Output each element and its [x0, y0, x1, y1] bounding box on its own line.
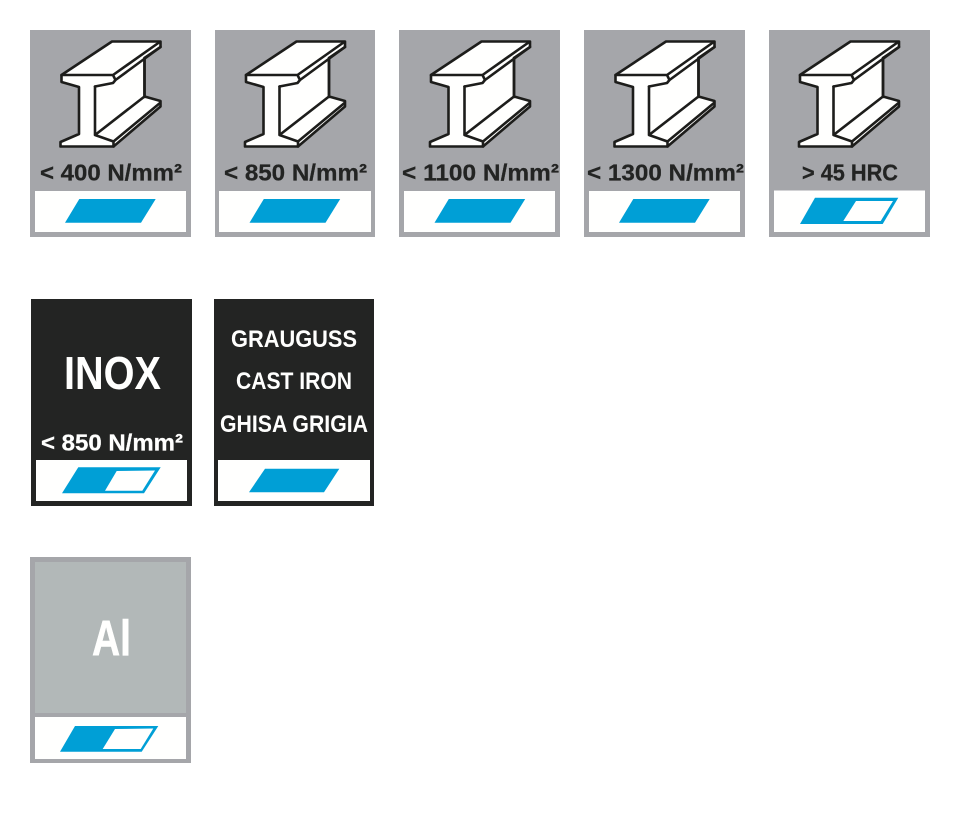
- card: under 1100 N/mm2: [399, 30, 560, 237]
- rating: full: [619, 199, 710, 223]
- label: under 850 N/mm2: < 850 N/mm²: [224, 160, 367, 186]
- rating box: [219, 191, 371, 232]
- card: aluminium: [30, 557, 191, 763]
- rating box: [36, 460, 187, 501]
- rating: full: [250, 199, 340, 223]
- card: under 400 N/mm2: [30, 30, 191, 237]
- card: under 850 N/mm2: [215, 30, 375, 237]
- card: over 45 HRC: [769, 30, 930, 237]
- label: INOX: INOX: [64, 347, 161, 399]
- card: under 1300 N/mm2: [584, 30, 745, 237]
- rating box: [35, 717, 186, 759]
- rating box: [35, 191, 186, 232]
- rating box: [404, 191, 555, 232]
- label: GRAUGUSS: GRAUGUSS: [231, 326, 357, 353]
- label: under 1300 N/mm2: < 1300 N/mm²: [587, 160, 744, 186]
- rating: full: [434, 199, 525, 223]
- label: under 1100 N/mm2: < 1100 N/mm²: [402, 160, 559, 186]
- icon: steel beam: [614, 42, 714, 146]
- icon: steel beam: [245, 42, 345, 146]
- rating: partial: [62, 467, 161, 493]
- rating box: [774, 190, 925, 232]
- label: over 45 HRC: > 45 HRC: [802, 160, 898, 186]
- panel: aluminium field: [35, 562, 186, 713]
- label: CAST IRON: CAST IRON: [236, 368, 352, 395]
- label: Al: Al: [92, 610, 131, 666]
- rating box: [589, 191, 740, 232]
- rating: partial: [60, 726, 158, 752]
- label: under 850 N/mm2: < 850 N/mm²: [41, 430, 183, 456]
- icon: steel beam: [60, 42, 160, 146]
- label: GHISA GRIGIA: GHISA GRIGIA: [220, 411, 368, 438]
- rating: partial: [800, 198, 898, 224]
- card: cast iron: [214, 299, 374, 506]
- rating: full: [249, 469, 339, 492]
- icon: steel beam: [430, 42, 530, 146]
- rating: full: [65, 199, 156, 223]
- label: under 400 N/mm2: < 400 N/mm²: [40, 160, 182, 186]
- card: INOX: [31, 299, 192, 506]
- icon: steel beam: [799, 42, 899, 146]
- rating box: [218, 460, 370, 501]
